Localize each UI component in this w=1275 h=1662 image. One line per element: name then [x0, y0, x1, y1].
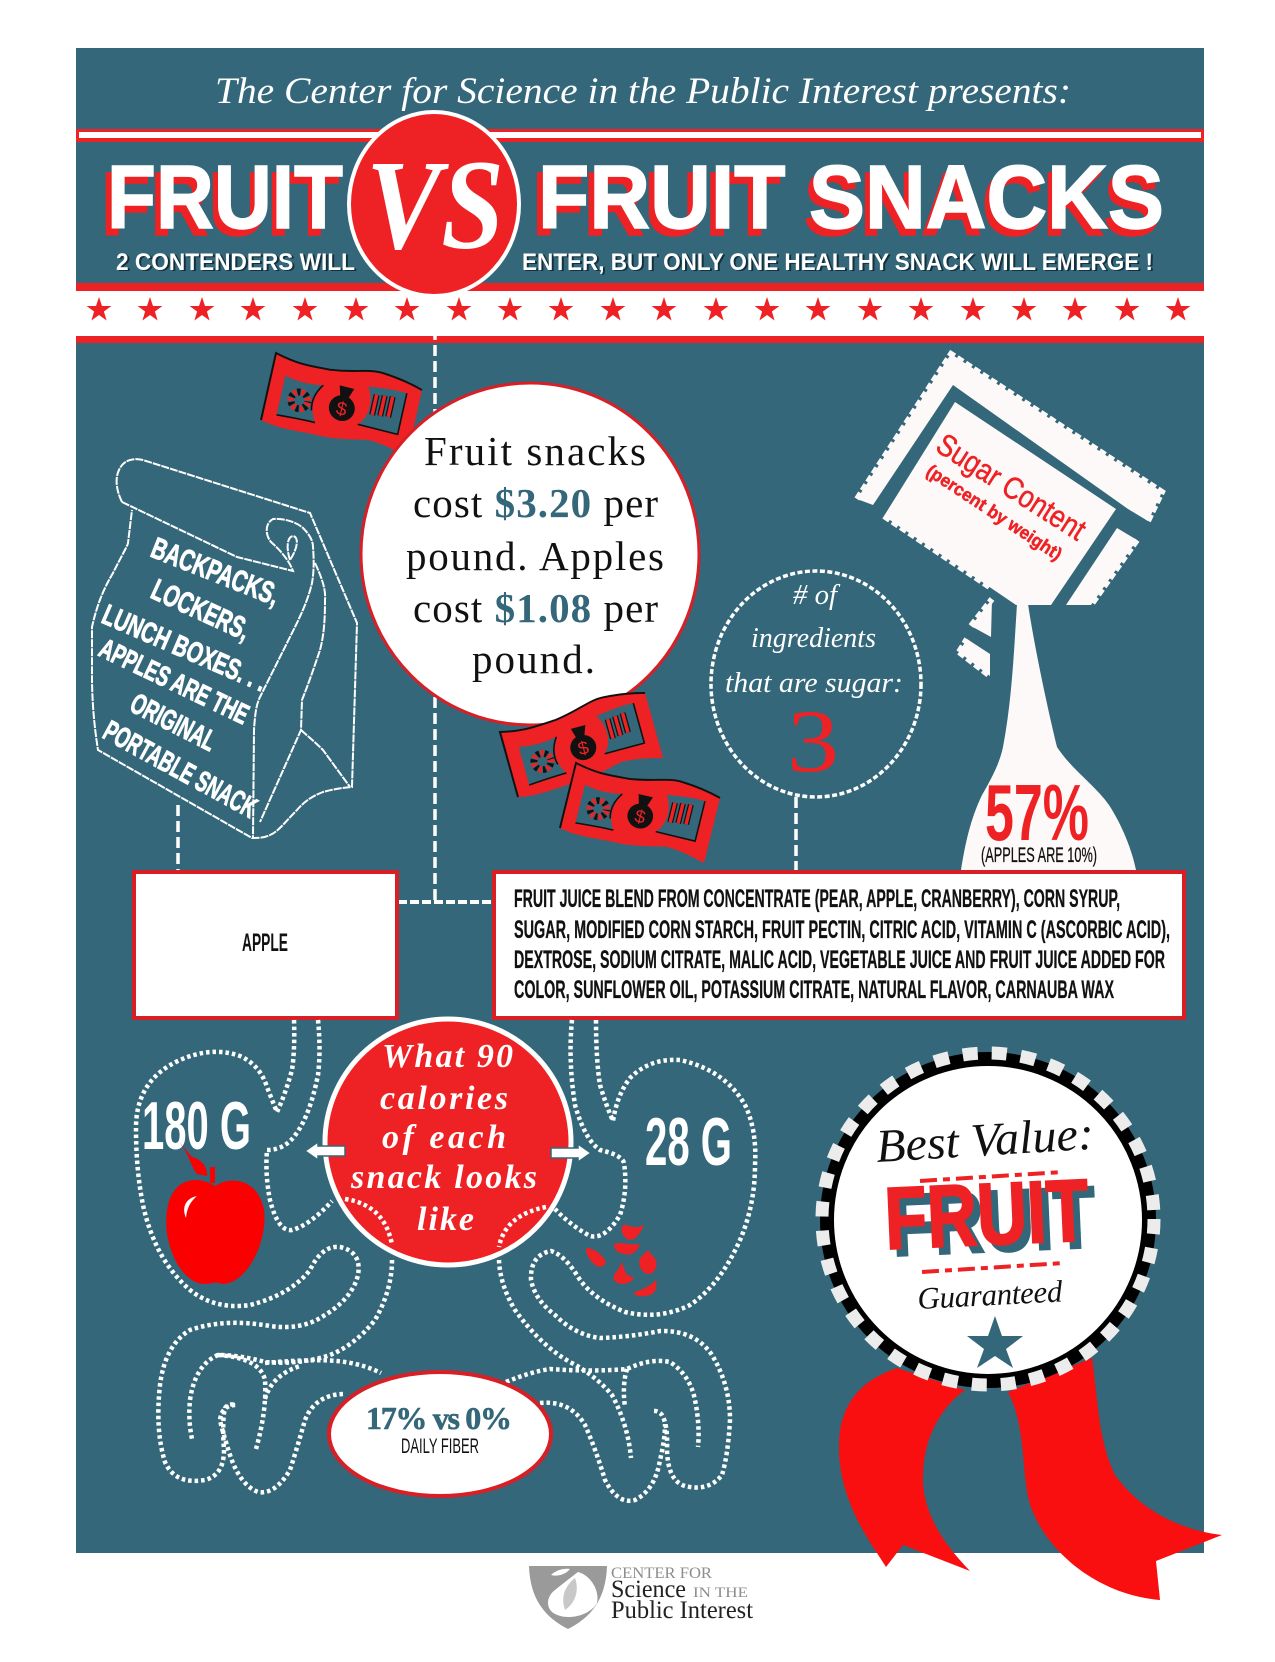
icon: money bill bottom: $ — [633, 805, 648, 828]
bag text: BACKPACKS, — [146, 532, 284, 612]
connector: bag to apple box — [176, 805, 180, 872]
badge: best value — [822, 1053, 1154, 1385]
bag text: LOCKERS, — [146, 573, 255, 647]
bag text: LUNCH BOXES. . . — [97, 599, 271, 698]
arrow: left — [305, 1142, 345, 1160]
callout: cost circle: cost $3.20 per — [413, 480, 658, 526]
dotted squiggle connectors — [136, 1020, 755, 1501]
label: 180 G: 180 G — [142, 1088, 251, 1164]
bottom star band — [76, 283, 1204, 343]
sugar heading: (percent by weight) — [923, 461, 1066, 564]
callout: 90 calories circle: like — [417, 1201, 474, 1238]
callout: 90 calories circle — [325, 1019, 571, 1265]
logo: center for science in the public interest: CENTER FOR — [611, 1565, 712, 1582]
icon: money bill bottom — [559, 756, 722, 865]
box: fruit snack ingredients — [494, 872, 1184, 1018]
icon: money bill top: $ — [334, 397, 350, 420]
logo: center for science in the public interest: Science — [611, 1576, 686, 1603]
callout: ingredients circle — [711, 571, 921, 797]
arrow: right — [551, 1144, 591, 1162]
callout: 90 calories circle: calories — [380, 1080, 508, 1117]
callout: cost circle: pound. Apples — [406, 533, 664, 579]
callout: 90 calories circle: What 90 — [382, 1038, 513, 1075]
ribbon: right tail — [1008, 1358, 1222, 1600]
icon: paper bag outline — [92, 459, 357, 838]
connector: center vertical dashed line — [433, 297, 437, 902]
connector: between boxes — [398, 900, 492, 904]
title: FRUIT: FRUIT — [107, 148, 343, 248]
connector: ingredient circle to box — [794, 797, 798, 872]
label: 28 G: 28 G — [645, 1104, 732, 1180]
note: apples 10 percent: (APPLES ARE 10%) — [981, 844, 1097, 867]
presenter line: The Center for Science in the Public Interest presents: — [215, 71, 1071, 112]
callout: 90 calories circle: of each — [382, 1119, 506, 1156]
logo: center for science in the public interest: Public Interest — [611, 1597, 753, 1624]
ribbon: left tail — [839, 1368, 970, 1571]
sugar heading: Sugar Content — [930, 426, 1093, 547]
top striped band — [76, 129, 1204, 142]
VS circle — [349, 112, 519, 296]
title: FRUIT: FRUIT — [101, 155, 339, 255]
bag text: PORTABLE SNACK — [98, 715, 262, 825]
icon: sugar packet and pour — [857, 354, 1162, 870]
callout: cost circle — [361, 383, 699, 725]
subtitle left: 2 CONTENDERS WILL — [116, 249, 355, 276]
callout: daily fiber oval: 17% vs 0% — [366, 1400, 512, 1436]
icon: money bill middle — [498, 686, 664, 799]
callout: 90 calories circle: snack looks — [350, 1159, 537, 1196]
callout: ingredients circle: ingredients — [751, 622, 876, 654]
title: FRUIT SNACKS: FRUIT SNACKS — [532, 155, 1160, 255]
badge: best value: Guaranteed — [917, 1273, 1064, 1316]
box: apple ingredients — [134, 872, 397, 1018]
logo: center for science in the public interest: IN THE — [693, 1585, 748, 1601]
icon: money bill middle: $ — [575, 736, 592, 759]
box: apple ingredients: APPLE — [242, 929, 288, 957]
badge: best value: Best Value: — [874, 1108, 1095, 1173]
stat: 57 percent: 57% — [985, 768, 1089, 857]
callout: ingredients circle: # of — [793, 579, 841, 611]
bag text: APPLES ARE THE — [94, 632, 254, 730]
callout: cost circle: cost $1.08 per — [413, 585, 658, 631]
callout: cost circle: pound. — [472, 636, 595, 682]
callout: daily fiber oval — [329, 1372, 551, 1496]
subtitle left: 2 CONTENDERS WILL — [118, 250, 357, 277]
badge: best value: FRUIT — [890, 1167, 1098, 1275]
callout: ingredients circle: that are sugar: — [725, 667, 903, 699]
bag text — [94, 532, 284, 825]
badge: best value: FRUIT — [883, 1160, 1091, 1268]
subtitle right: ENTER, BUT ONLY ONE HEALTHY SNACK WILL EMERGE ! — [522, 249, 1153, 276]
bag text: ORIGINAL — [125, 688, 221, 758]
callout: daily fiber oval: DAILY FIBER — [401, 1435, 479, 1458]
title: FRUIT SNACKS: FRUIT SNACKS — [538, 148, 1164, 248]
VS circle: VS — [366, 134, 504, 276]
callout: cost circle: Fruit snacks — [424, 428, 646, 474]
icon: apple — [166, 1142, 265, 1284]
callout: ingredients circle: 3 — [787, 693, 839, 791]
icon: money bill top — [260, 346, 423, 459]
subtitle right: ENTER, BUT ONLY ONE HEALTHY SNACK WILL EMERGE ! — [524, 250, 1155, 277]
logo: center for science in the public interest — [529, 1565, 753, 1629]
icon: fruit snack pieces — [586, 1224, 657, 1296]
